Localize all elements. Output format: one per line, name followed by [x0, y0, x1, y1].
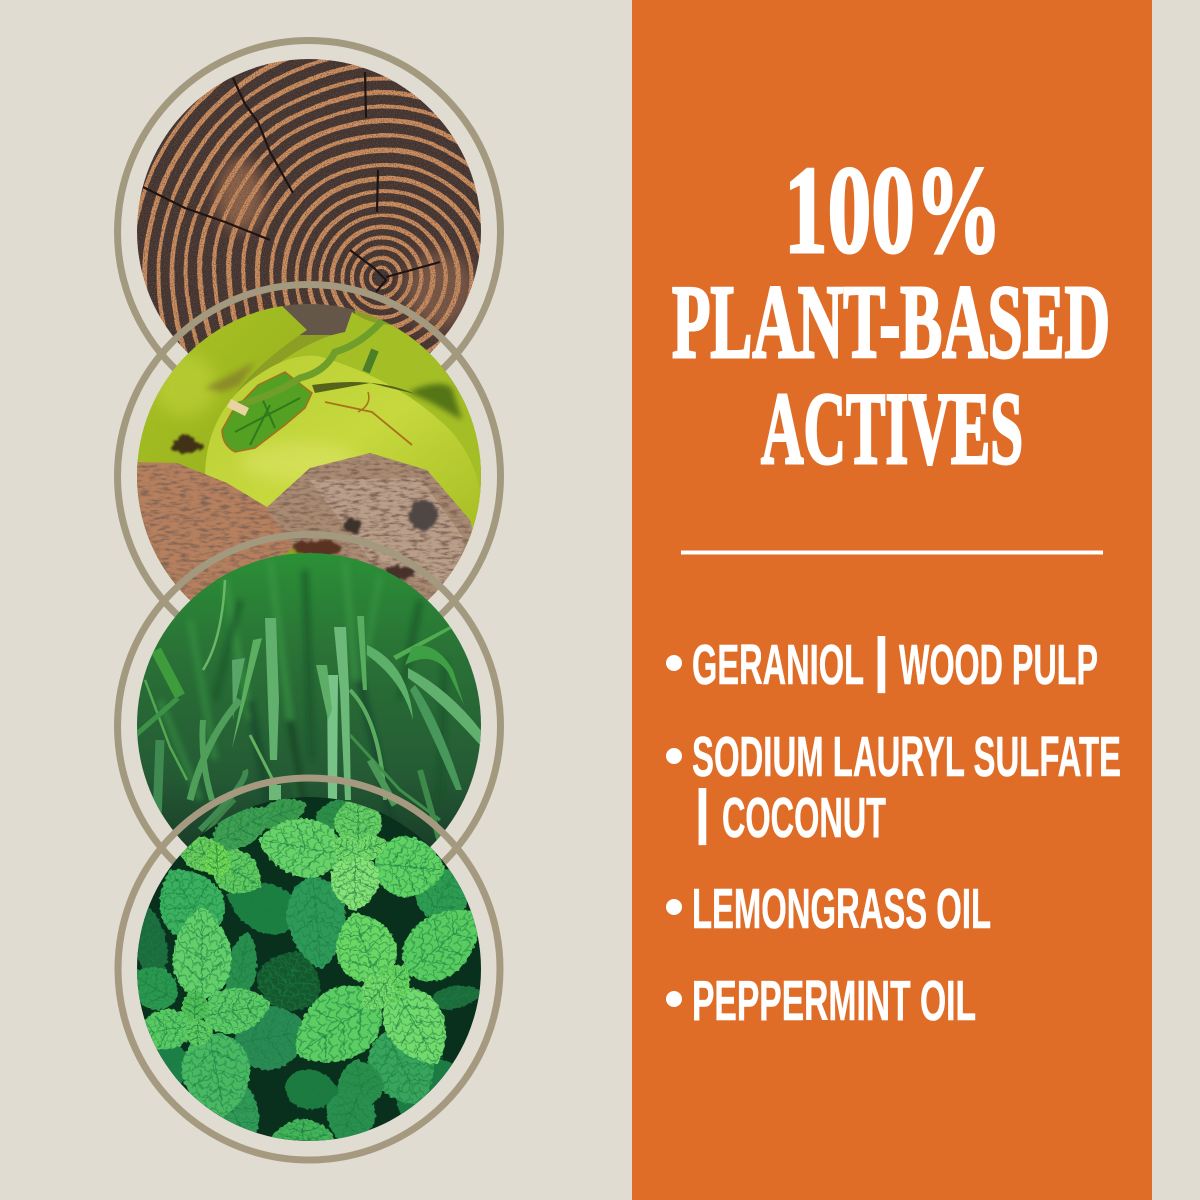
husk dark spots: [293, 500, 438, 580]
panel: wood circle: [114, 37, 504, 372]
background shadow: [275, 304, 355, 335]
item: sodium lauryl sulfate: [666, 725, 1121, 850]
back left coconut: [130, 305, 307, 480]
divider rule: [681, 550, 1103, 554]
heading: [672, 142, 1110, 486]
soft background blades: [157, 568, 450, 820]
ingredient list: [666, 626, 1121, 1033]
ring: wood: [118, 40, 500, 424]
item: sodium lauryl sulfate: |: [694, 778, 711, 846]
item: lemongrass oil: [666, 877, 991, 941]
item: geraniol: GERANIOL: [692, 633, 864, 697]
back right coconut: [278, 312, 481, 520]
item: lemongrass oil: LEMONGRASS OIL: [692, 877, 991, 941]
photo: coconuts: [137, 304, 481, 600]
ring: coconut: [118, 284, 500, 668]
husks: [137, 453, 472, 600]
item: peppermint oil: [666, 969, 976, 1033]
photo: peppermint leaves: [137, 797, 481, 1141]
item: peppermint oil: PEPPERMINT OIL: [692, 969, 976, 1033]
panel: peppermint circle: [103, 778, 500, 1160]
item: sodium lauryl sulfate: COCONUT: [722, 786, 886, 850]
photo: lemongrass: [137, 553, 481, 847]
photo: wood rings: [137, 59, 481, 354]
main coconut: [205, 356, 482, 540]
panel: orange ingredients panel: [632, 0, 1152, 1200]
ring: lemongrass: [118, 534, 500, 918]
heading: 100%: [784, 142, 1002, 280]
ring: peppermint: [118, 778, 500, 1160]
item: geraniol: [666, 626, 1098, 697]
panel: lemongrass circle: [114, 531, 504, 865]
item: geraniol: |: [873, 626, 890, 694]
calyx: [222, 372, 312, 452]
foreground blades: [137, 580, 481, 840]
panel: coconut circle: [114, 281, 504, 618]
stem: [235, 320, 383, 406]
